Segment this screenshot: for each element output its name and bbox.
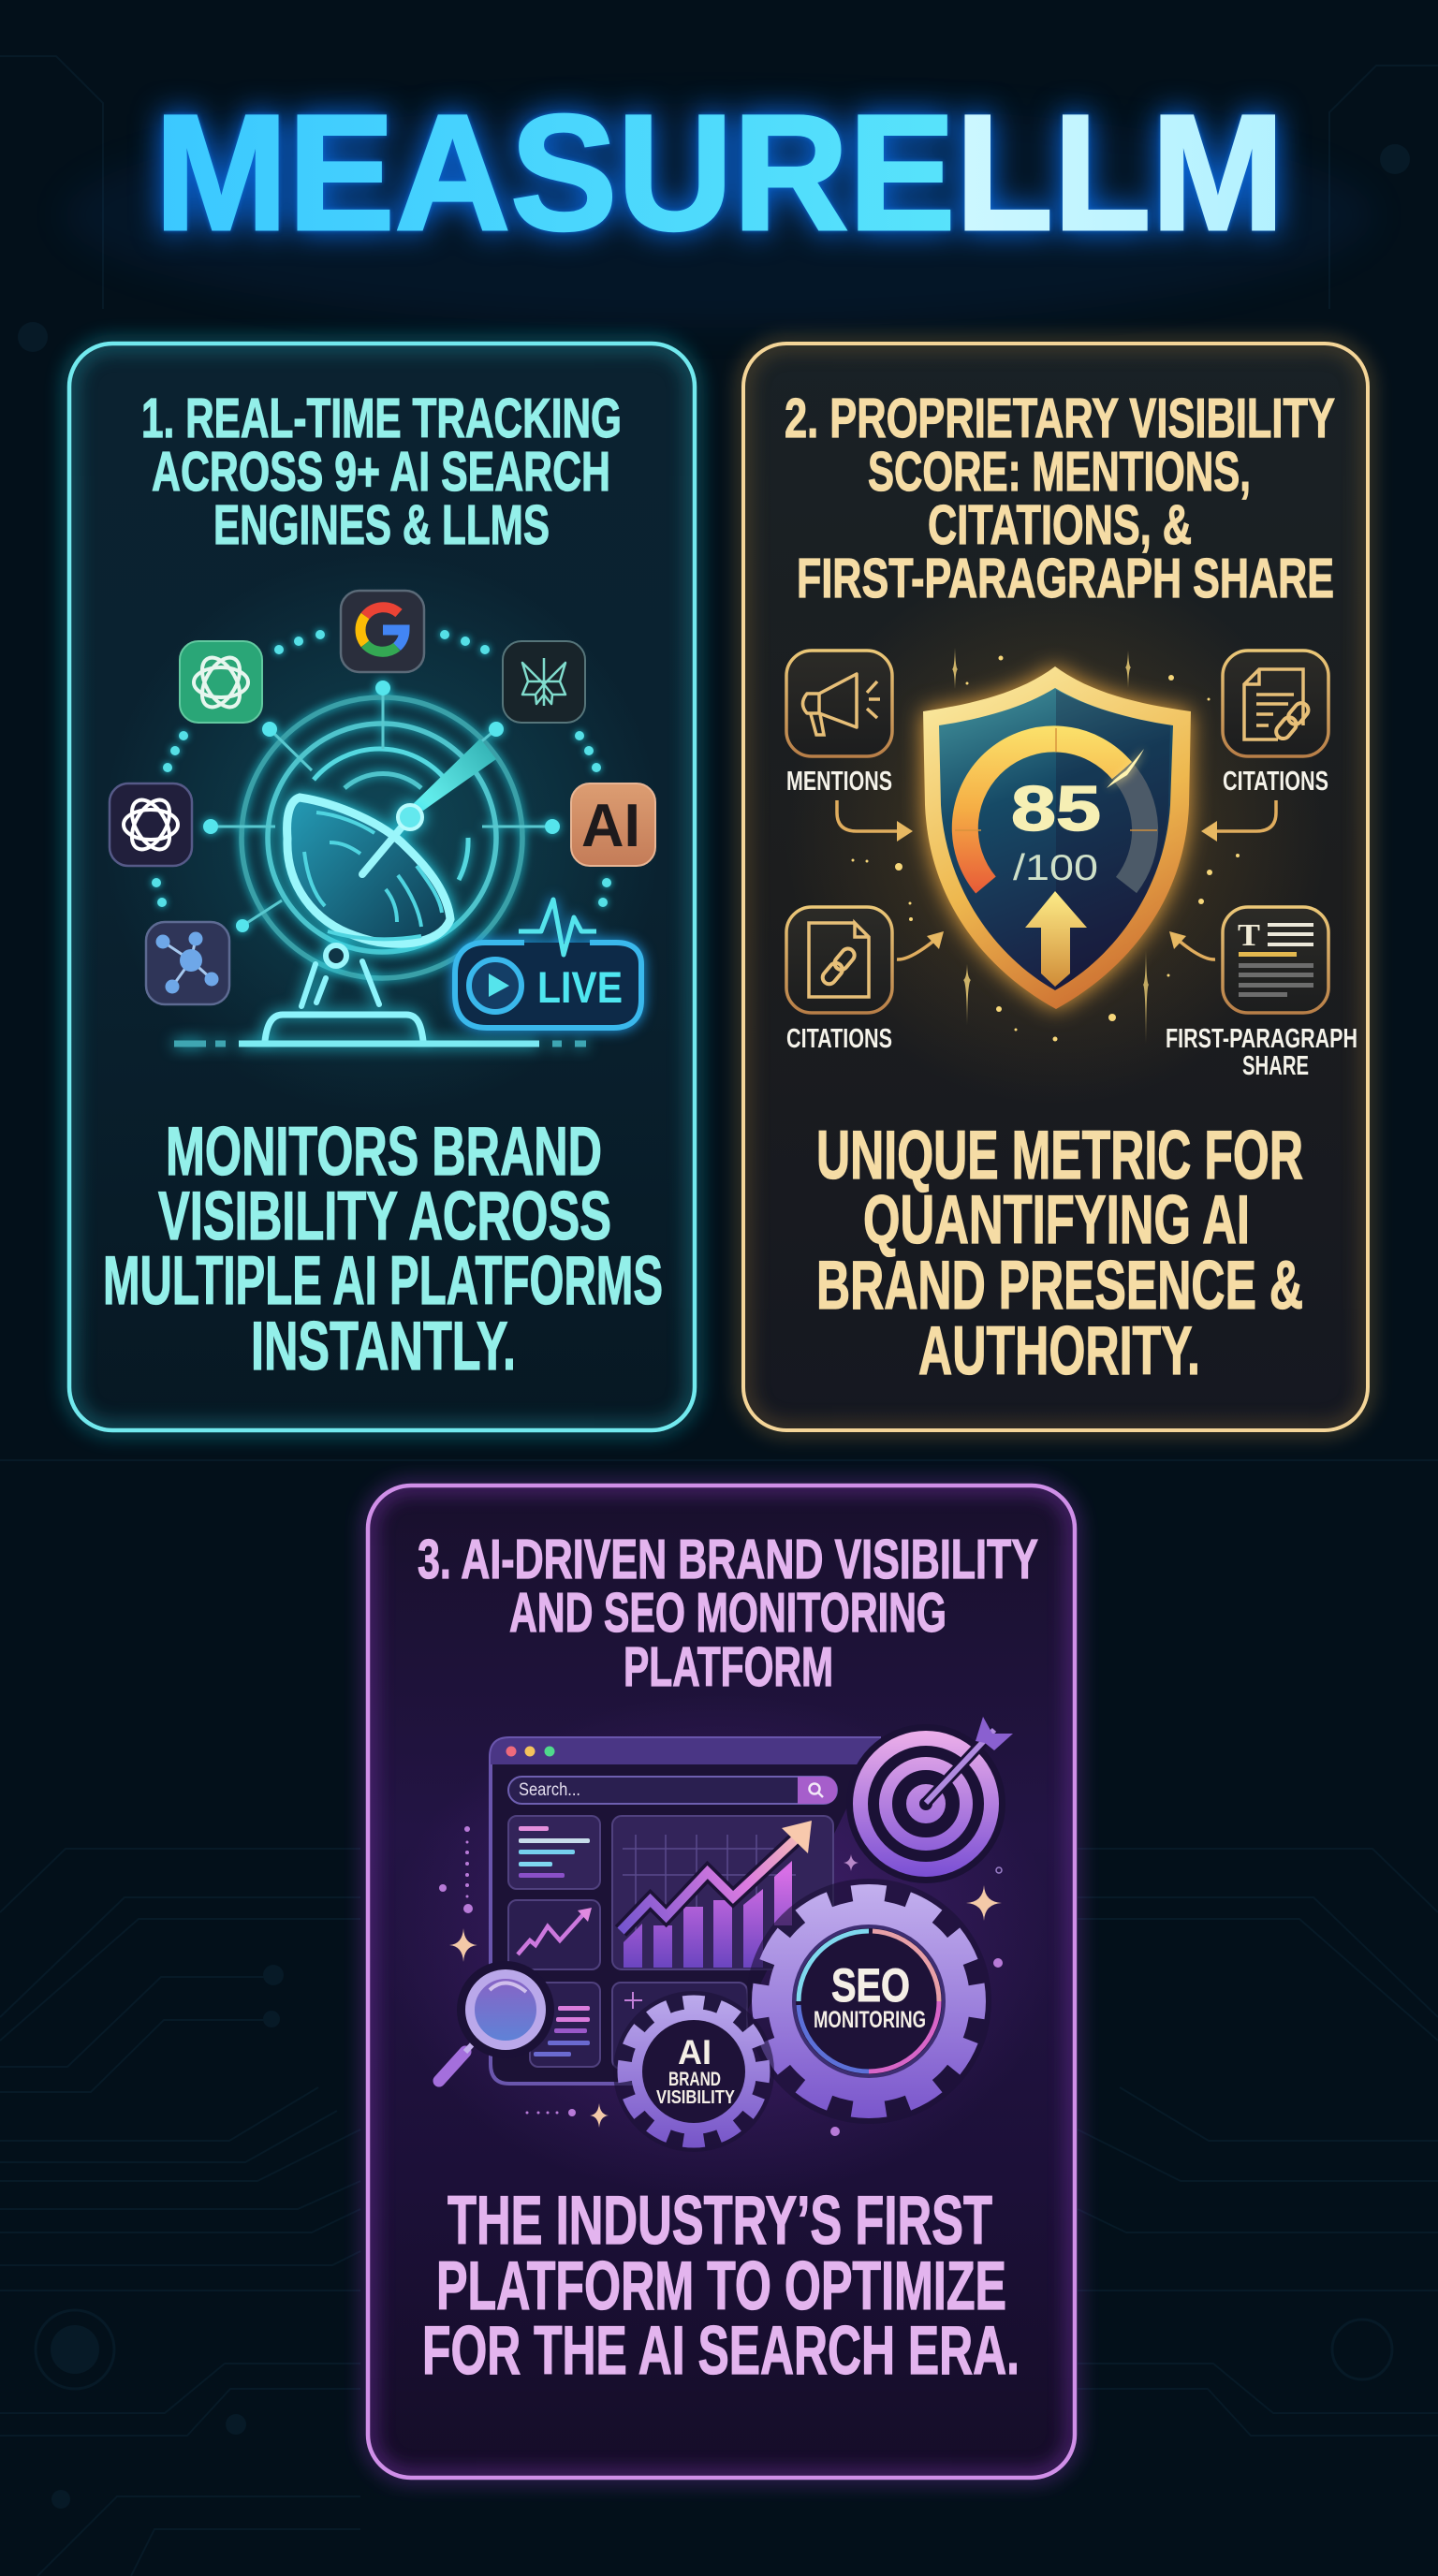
gear: AI brand visibility xyxy=(613,1991,774,2152)
dotted orbit xyxy=(152,630,611,907)
label: citations left: CITATIONS xyxy=(786,1024,892,1054)
panel 1 summary text: INSTANTLY. xyxy=(251,1309,516,1384)
radar rings and nodes xyxy=(203,681,560,978)
panel 1 heading: ACROSS 9+ AI SEARCH xyxy=(152,441,610,503)
label: first-paragraph share xyxy=(1166,1024,1357,1081)
icon: ChatGPT green xyxy=(180,641,262,723)
icon: first paragraph: T xyxy=(1238,918,1260,953)
sparkles and dots xyxy=(439,1826,1003,2136)
icon: Anthropic: AI xyxy=(581,791,640,859)
panel 2 heading: CITATIONS, & xyxy=(928,494,1192,556)
panel 2 summary text: AUTHORITY. xyxy=(918,1313,1200,1389)
main chart card xyxy=(612,1816,833,1969)
panel 1 heading: 1. REAL-TIME TRACKING xyxy=(141,388,622,449)
radar sweep beam xyxy=(412,739,496,811)
score value xyxy=(1011,773,1101,888)
panel 1 summary text xyxy=(103,1114,663,1384)
icon: network xyxy=(146,922,229,1004)
panel 3 heading: AND SEO MONITORING xyxy=(509,1582,946,1644)
label: mentions: MENTIONS xyxy=(786,767,892,797)
icon: document with link xyxy=(1223,651,1328,756)
lower cards xyxy=(530,1983,747,2069)
LIVE badge: LIVE xyxy=(537,962,623,1012)
icon: file with link xyxy=(786,907,892,1013)
satellite dish xyxy=(174,798,586,1044)
gear: AI brand visibility: VISIBILITY xyxy=(656,2087,736,2108)
panel 1 summary text: VISIBILITY ACROSS xyxy=(158,1178,611,1254)
shield xyxy=(923,666,1191,1009)
gear: AI brand visibility: BRAND xyxy=(668,2069,721,2090)
score value: /100 xyxy=(1013,848,1098,888)
gear: SEO monitoring xyxy=(746,1879,991,2124)
score shield illustration xyxy=(786,648,1357,1081)
gear: SEO monitoring: SEO xyxy=(831,1959,910,2012)
browser window xyxy=(491,1737,881,2084)
icon: target with arrow xyxy=(846,1717,1013,1883)
panel 3: brand visibility platform xyxy=(368,1486,1075,2478)
icon: OpenAI dark xyxy=(110,783,192,866)
panel 1 summary text: MULTIPLE AI PLATFORMS xyxy=(103,1243,663,1319)
label: citations right: CITATIONS xyxy=(1223,767,1328,797)
score gauge xyxy=(955,728,1157,886)
search bar: Search... xyxy=(519,1780,580,1800)
label: first-paragraph share: SHARE xyxy=(1242,1051,1309,1081)
panel 3 heading xyxy=(418,1529,1038,1698)
gear: AI brand visibility: AI xyxy=(678,2033,712,2071)
panel 1 summary text: MONITORS BRAND xyxy=(166,1114,602,1190)
panel 3 summary text: PLATFORM TO OPTIMIZE xyxy=(436,2248,1006,2324)
panel 1: real-time tracking xyxy=(69,344,695,1430)
icon: magnifying glass xyxy=(439,1961,554,2081)
icon: Anthropic xyxy=(571,783,655,866)
panel 2 summary text: QUANTIFYING AI xyxy=(863,1182,1250,1258)
panel 2: proprietary visibility score xyxy=(743,344,1368,1430)
icon: megaphone xyxy=(786,651,892,756)
panel 3 summary text: FOR THE AI SEARCH ERA. xyxy=(422,2313,1020,2389)
panel 2 heading xyxy=(785,388,1335,609)
panel 3 summary text: THE INDUSTRY’S FIRST xyxy=(448,2183,992,2259)
SEO dashboard illustration xyxy=(439,1717,1013,2152)
icon: Perplexity xyxy=(503,641,585,723)
sparkles xyxy=(852,648,1240,1044)
search bar xyxy=(508,1777,837,1804)
LIVE badge xyxy=(455,900,641,1028)
panel 2 heading: SCORE: MENTIONS, xyxy=(868,441,1251,503)
panel 1 heading xyxy=(141,388,622,556)
panel 2 summary text xyxy=(816,1118,1303,1389)
panel 3 summary text xyxy=(422,2183,1020,2389)
icon: first paragraph xyxy=(1223,907,1328,1013)
score value: 85 xyxy=(1011,773,1101,844)
gear: SEO monitoring: MONITORING xyxy=(814,2007,926,2033)
panel 3 heading: 3. AI-DRIVEN BRAND VISIBILITY xyxy=(418,1529,1038,1590)
icon: Google xyxy=(341,591,424,672)
title: MEASURELLM xyxy=(154,81,1284,265)
connector arrows xyxy=(837,800,1276,959)
mini chart card xyxy=(508,1900,600,1969)
radar illustration xyxy=(110,591,655,1044)
list card xyxy=(508,1816,600,1889)
label: first-paragraph share: FIRST-PARAGRAPH xyxy=(1166,1024,1357,1054)
up arrow xyxy=(1025,891,1087,987)
panel 3 heading: PLATFORM xyxy=(624,1636,833,1698)
panel 1 heading: ENGINES & LLMS xyxy=(213,494,550,556)
